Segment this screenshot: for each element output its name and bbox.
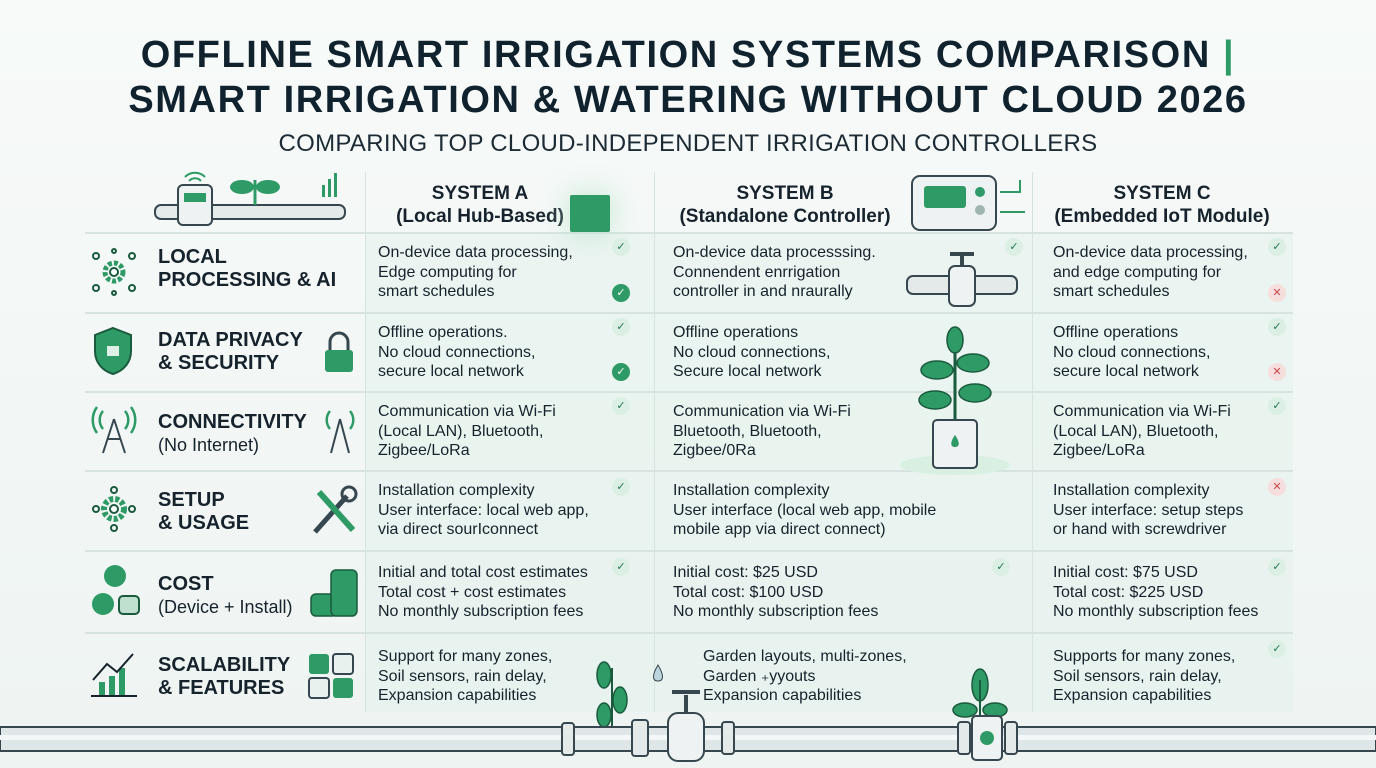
label	[158, 654, 290, 699]
row: setup: ✕	[1272, 481, 1282, 493]
row: local processing: ✓	[1272, 241, 1282, 253]
icon: A plant box	[570, 195, 610, 232]
icon: header pipe and plant	[154, 172, 346, 226]
row: connectivity: Zigbee/LoRa	[378, 442, 470, 459]
row: cost: ✓	[996, 561, 1006, 573]
row: cost: No monthly subscription fees	[378, 603, 583, 620]
icon: shield	[94, 326, 132, 375]
icon: tower	[92, 406, 136, 454]
row: cost: No monthly subscription fees	[673, 603, 878, 620]
pipe: bottom	[0, 661, 1376, 762]
icon: tools	[313, 486, 358, 534]
row: privacy: secure local network	[378, 363, 524, 380]
row: setup: ✓	[616, 481, 626, 493]
cell A: On-device data processing,	[378, 244, 573, 261]
row: connectivity: Zigbee/0Ra	[673, 442, 756, 459]
icon: gear network	[92, 248, 136, 296]
subtitle: COMPARING TOP CLOUD-INDEPENDENT IRRIGATION CONTROLLERS	[278, 130, 1097, 157]
row: scalability: Supports for many zones,	[1053, 648, 1235, 665]
label: SCALABILITY	[158, 654, 290, 676]
label: PROCESSING & AI	[158, 269, 336, 291]
row: connectivity: ✓	[1272, 400, 1282, 412]
cell B	[673, 244, 876, 300]
row: cost: Total cost: $225 USD	[1053, 584, 1203, 600]
row: connectivity: (Local LAN), Bluetooth,	[378, 422, 543, 440]
label	[158, 411, 307, 455]
icon: coin stack	[310, 569, 358, 617]
row: scalability	[91, 640, 1286, 704]
header: system A: (Local Hub-Based)	[396, 206, 564, 227]
row: local processing: ✓	[616, 287, 626, 299]
icon: gear	[92, 486, 136, 532]
label: LOCAL	[158, 246, 227, 268]
icon: coins	[92, 565, 140, 615]
row: cost: Initial cost: $75 USD	[1053, 564, 1198, 581]
icon: B valve	[906, 252, 1018, 307]
row: local processing	[92, 238, 1286, 302]
row: scalability: Expansion capabilities	[378, 687, 536, 704]
row: privacy: Secure local network	[673, 363, 822, 380]
row: setup: Installation complexity	[673, 482, 830, 499]
icon: controller	[911, 175, 1025, 231]
title	[128, 34, 1248, 121]
row: cost: No monthly subscription fees	[1053, 603, 1258, 620]
label: CONNECTIVITY	[158, 411, 307, 433]
label	[158, 489, 249, 534]
row: setup: Installation complexity	[378, 482, 535, 499]
label: COST	[158, 573, 214, 595]
row: privacy	[94, 318, 1286, 381]
label: SETUP	[158, 489, 225, 511]
row: privacy: secure local network	[1053, 363, 1199, 380]
row: scalability: Support for many zones,	[378, 648, 552, 665]
row: privacy: ✕	[1272, 366, 1282, 378]
row: cost	[92, 558, 1286, 620]
row: connectivity: ✓	[616, 400, 626, 412]
row: connectivity: Communication via Wi-Fi	[1053, 403, 1231, 420]
row: privacy: Offline operations	[673, 324, 798, 341]
row: cost: Total cost: $100 USD	[673, 584, 823, 600]
cell C: smart schedules	[1053, 283, 1170, 300]
icon: growth chart	[91, 653, 137, 697]
table background	[365, 232, 1293, 712]
cell C: and edge computing for	[1053, 264, 1221, 280]
row: local processing: ✕	[1272, 287, 1282, 299]
row: local processing: ✓	[616, 241, 626, 253]
header: system C: SYSTEM C	[1113, 183, 1211, 204]
title: SMART IRRIGATION & WATERING WITHOUT CLOUD 2026	[128, 79, 1248, 121]
row: setup: User interface: setup steps	[1053, 502, 1243, 518]
header: system A	[396, 183, 564, 227]
row: setup: User interface (local web app, mobile	[673, 502, 936, 518]
label: & USAGE	[158, 512, 249, 534]
row: scalability: Expansion capabilities	[703, 687, 861, 704]
row: scalability: Expansion capabilities	[1053, 687, 1211, 704]
row: privacy: No cloud connections,	[673, 344, 830, 360]
label: & SECURITY	[158, 352, 279, 374]
header: system A: SYSTEM A	[432, 183, 528, 204]
row: scalability: Garden layouts, multi-zones,	[703, 648, 907, 665]
row: cost: Total cost + cost estimates	[378, 584, 566, 600]
cell C: On-device data processing,	[1053, 244, 1248, 261]
row: cost: ✓	[616, 561, 626, 573]
icon: padlock	[325, 332, 353, 372]
label	[158, 246, 336, 291]
row: connectivity: Bluetooth, Bluetooth,	[673, 422, 822, 440]
cell B: On-device data processsing.	[673, 244, 876, 261]
label: (Device + Install)	[158, 597, 293, 617]
icon: B potted plant	[900, 326, 1010, 475]
row: setup: User interface: local web app,	[378, 502, 589, 518]
row: scalability: Soil sensors, rain delay,	[1053, 668, 1222, 684]
cell A	[378, 244, 573, 300]
row: privacy: No cloud connections,	[378, 344, 535, 360]
row: scalability: ✓	[1272, 643, 1282, 655]
icon: feature grid	[308, 653, 354, 699]
label	[158, 573, 293, 617]
label	[158, 329, 303, 374]
row: setup: Installation complexity	[1053, 482, 1210, 499]
cell C	[1053, 244, 1248, 300]
row: setup: or hand with screwdriver	[1053, 521, 1226, 538]
row: cost: ✓	[1272, 561, 1282, 573]
row: scalability: Soil sensors, rain delay,	[378, 668, 547, 684]
row: setup: mobile app via direct connect)	[673, 521, 886, 538]
row: setup	[92, 478, 1286, 538]
row: connectivity: Communication via Wi-Fi	[378, 403, 556, 420]
label: DATA PRIVACY	[158, 329, 303, 351]
row: connectivity	[92, 397, 1286, 459]
row: privacy: Offline operations	[1053, 324, 1178, 341]
header: system C	[1054, 183, 1270, 227]
header: system B: SYSTEM B	[736, 183, 834, 204]
row: setup: via direct sourIconnect	[378, 521, 538, 538]
row: scalability: Garden ₊yyouts	[703, 668, 816, 684]
header: system C: (Embedded IoT Module)	[1054, 206, 1270, 227]
row: connectivity: Communication via Wi-Fi	[673, 403, 851, 420]
title: OFFLINE SMART IRRIGATION SYSTEMS COMPARISON |	[141, 34, 1235, 76]
icon: tower small	[326, 410, 354, 454]
row: connectivity: (Local LAN), Bluetooth,	[1053, 422, 1218, 440]
row: privacy: ✓	[616, 366, 626, 378]
cell A: Edge computing for	[378, 264, 517, 280]
header: system B: (Standalone Controller)	[679, 206, 891, 227]
row: privacy: ✓	[616, 321, 626, 333]
row: privacy: Offline operations.	[378, 324, 508, 341]
cell B: controller in and nraurally	[673, 283, 853, 300]
cell B: Connendent enrrigation	[673, 264, 840, 280]
header: system B	[679, 183, 891, 227]
row: connectivity: Zigbee/LoRa	[1053, 442, 1145, 459]
cell A: smart schedules	[378, 283, 494, 300]
label: (No Internet)	[158, 435, 259, 455]
label: & FEATURES	[158, 677, 284, 699]
row: cost: Initial cost: $25 USD	[673, 564, 818, 581]
row: cost: Initial and total cost estimates	[378, 564, 588, 581]
row: privacy: No cloud connections,	[1053, 344, 1210, 360]
row: privacy: ✓	[1272, 321, 1282, 333]
row: local processing: ✓	[1009, 241, 1019, 253]
